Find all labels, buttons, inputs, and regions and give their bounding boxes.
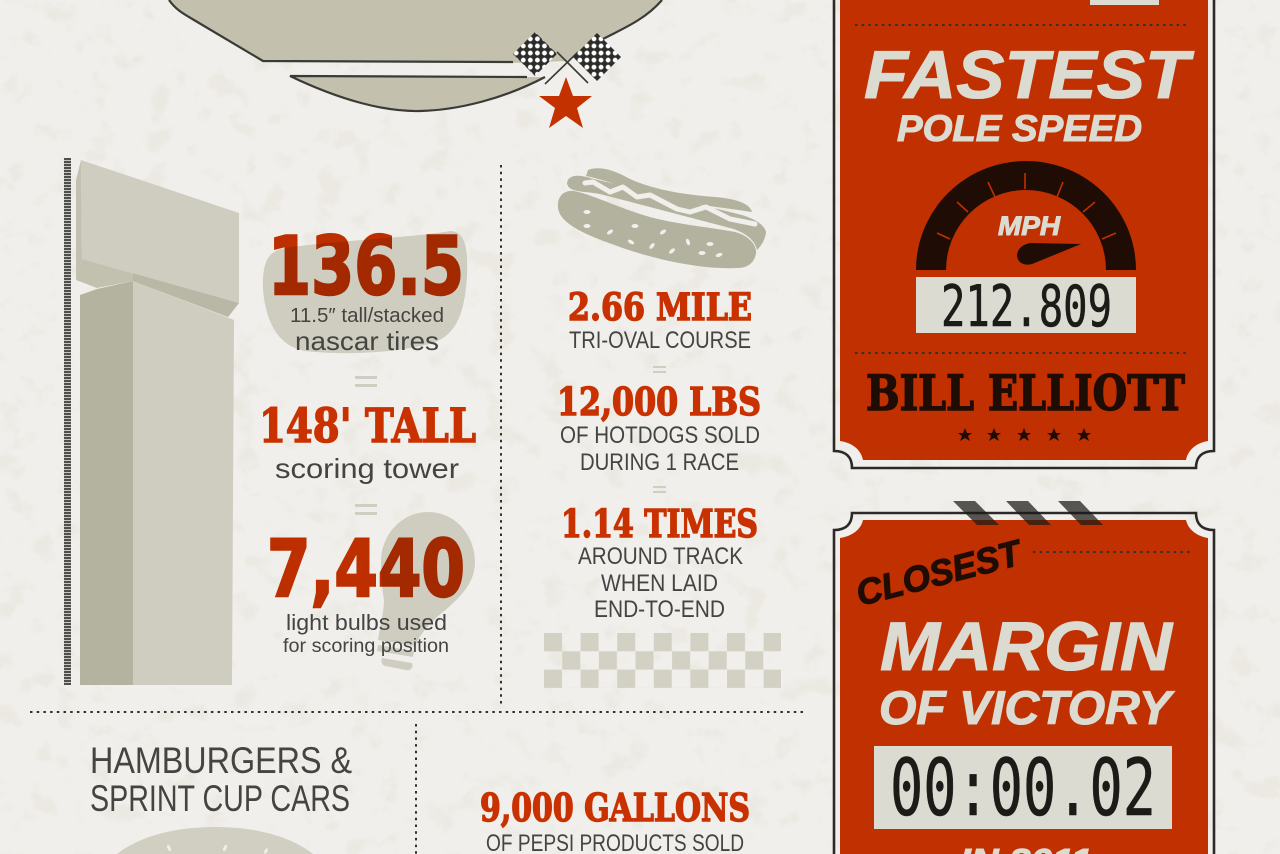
stat: 136.5 tires [263, 220, 467, 356]
speedometer gauge [916, 161, 1136, 270]
icon: red star [539, 77, 592, 128]
stat: 1.14 times [561, 501, 758, 623]
stat: 148 foot tower [259, 399, 476, 484]
stat: 1.14 times: END-TO-END [594, 596, 725, 623]
stat: 9,000 gallons: 9,000 GALLONS [480, 785, 750, 830]
icon: light bulb [377, 512, 475, 670]
stat: 12,000 lbs: OF HOTDOGS SOLD [560, 422, 760, 449]
top emblem: banner shape [169, 0, 662, 128]
divider equals [355, 376, 377, 387]
stat: 148 foot tower: scoring tower [275, 453, 459, 484]
stat: 12,000 lbs: 12,000 LBS [557, 379, 761, 424]
stat: 1.14 times: AROUND TRACK [578, 543, 743, 570]
speedometer gauge: MPH [998, 211, 1061, 241]
decorative tire marks [953, 501, 1103, 525]
LCD readout: margin: 00:00.02 [890, 744, 1156, 834]
divider equals [653, 366, 666, 373]
heading: fastest: FASTEST [864, 37, 1195, 113]
stat: 2.66 mile: TRI-OVAL COURSE [569, 327, 751, 354]
stat: 136.5 tires: 11.5″ tall/stacked [290, 305, 444, 327]
divider equals [355, 504, 377, 515]
divider equals [653, 486, 666, 493]
stat: 2.66 mile [568, 285, 752, 354]
heading: margin: MARGIN [880, 608, 1174, 685]
icon: crossed checkered flags [513, 32, 621, 84]
stat: 2.66 mile: 2.66 MILE [568, 285, 752, 329]
heading: pole speed: POLE SPEED [897, 108, 1142, 149]
heading: hamburgers and cars [90, 740, 352, 819]
panel: closest margin of victory [834, 501, 1214, 854]
stat: 1.14 times: 1.14 TIMES [561, 501, 758, 546]
stat: 7,440 bulbs: light bulbs used [286, 610, 447, 635]
stat: 148 foot tower: 148' TALL [259, 399, 476, 454]
five stars [958, 428, 1091, 441]
stat: 12,000 lbs [557, 379, 761, 476]
stat: 136.5 tires: 136.5 [268, 220, 464, 313]
driver name: BILL ELLIOTT [866, 364, 1185, 422]
stat: 136.5 tires: nascar tires [295, 326, 439, 356]
stat: 12,000 lbs: DURING 1 RACE [580, 449, 739, 476]
checkered strip [544, 633, 781, 688]
icon: hot dog [558, 168, 766, 268]
stat: 7,440 bulbs: for scoring position [283, 636, 449, 657]
stat: 7,440 bulbs [267, 512, 475, 670]
label: closest: CLOSEST [852, 531, 1028, 614]
heading: hamburgers and cars: SPRINT CUP CARS [90, 778, 350, 819]
heading: hamburgers and cars: HAMBURGERS & [90, 740, 352, 781]
LCD readout: pole speed: 212.809 [941, 274, 1112, 340]
icon: tire blob [263, 231, 467, 353]
stat: 1.14 times: WHEN LAID [601, 570, 718, 597]
stat: 9,000 gallons [480, 785, 750, 854]
icon: hamburger bun [117, 827, 313, 854]
stat: 7,440 bulbs: 7,440 [267, 525, 465, 615]
heading: of victory: OF VICTORY [879, 681, 1175, 734]
scoring tower illustration [68, 158, 239, 685]
panel: fastest pole speed [834, 0, 1214, 468]
